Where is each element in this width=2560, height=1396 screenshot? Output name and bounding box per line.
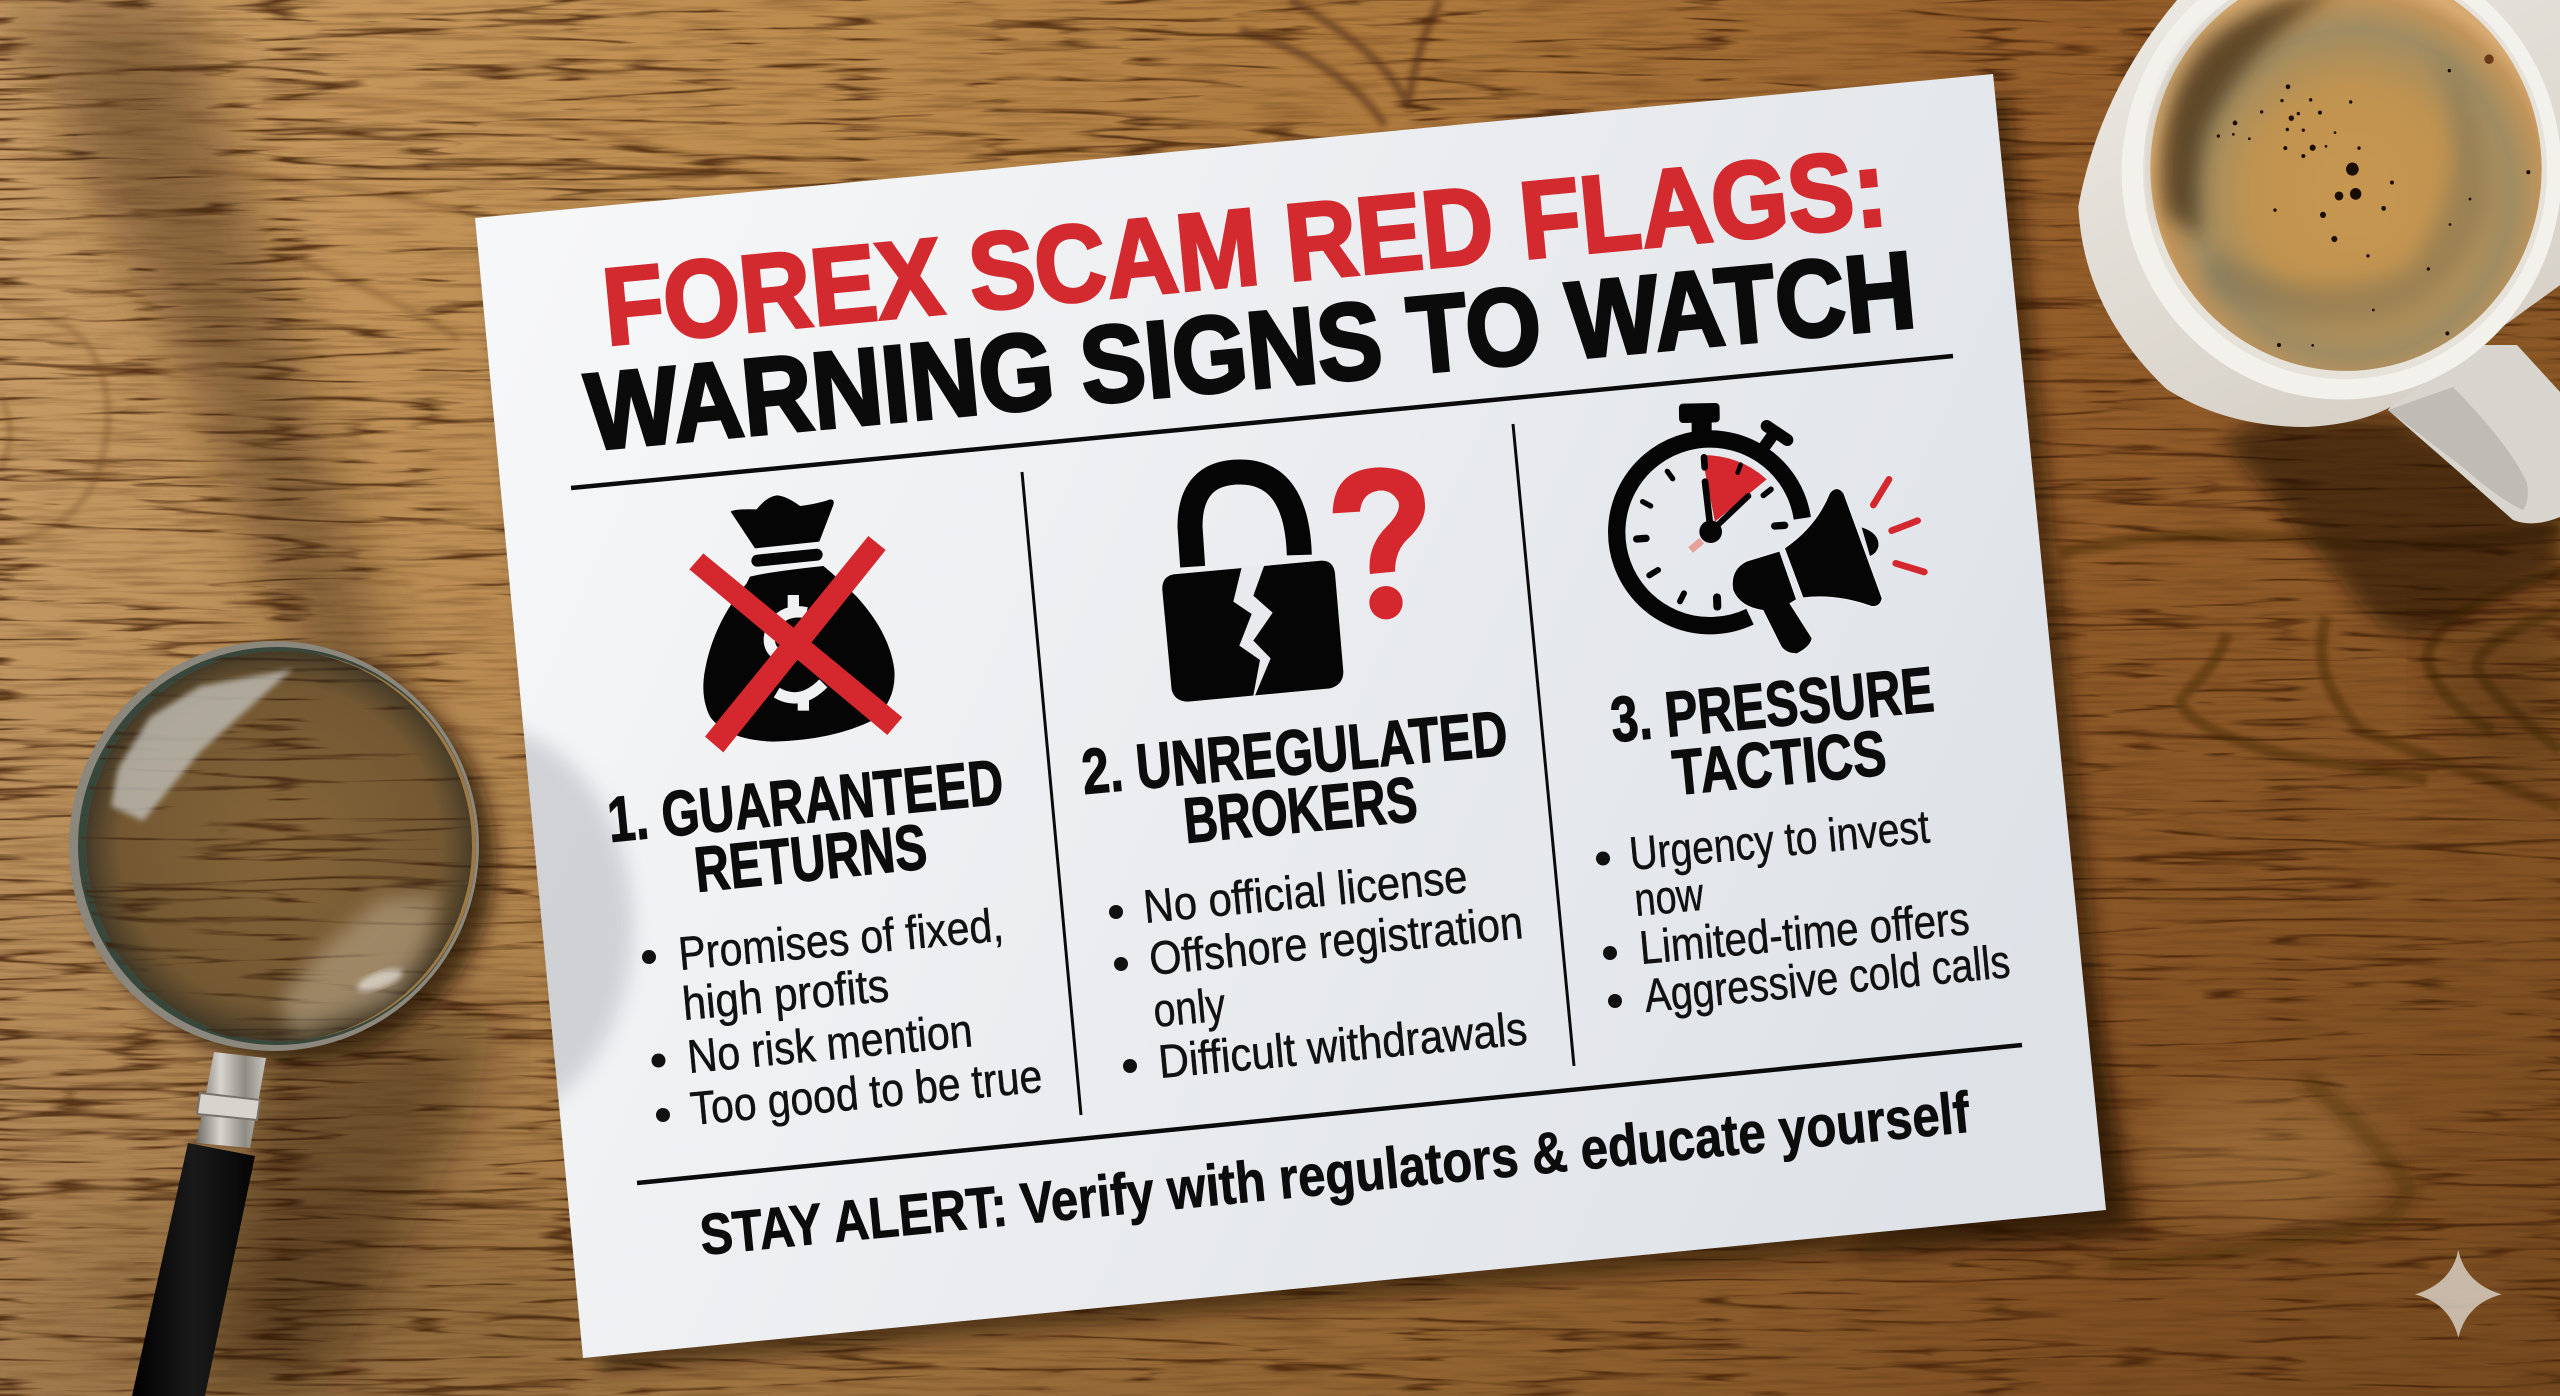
panel: pressure tactics [1596,403,2012,1022]
icon: crossed-out money bag [689,495,902,752]
coffee cup cast shadow [2220,410,2560,640]
footer callout: STAY ALERT: Verify with regulators & educate yourself [697,1080,1973,1268]
bullet list: guaranteed returns: high profits [680,958,891,1030]
bullet list: pressure tactics: Limited-time offers [1637,891,1972,974]
wood knot, lower right [2145,1085,2385,1225]
shadow of magnifier on sheet [524,726,640,1104]
heading: unregulated brokers: 2. UNREGULATED [1079,697,1510,808]
bullet list: guaranteed returns: No risk mention [685,1003,975,1083]
diagonal sun shadows [30,0,440,940]
bullet list: pressure tactics: now [1632,867,1706,926]
bullet list: guaranteed returns: Promises of fixed, [676,898,1006,980]
cup rim [2122,0,2560,400]
bullet list: unregulated brokers [1109,849,1529,1088]
bullet list: guaranteed returns: Too good to be true [688,1049,1044,1135]
icon: coffee cup [2078,0,2560,523]
icon: four-point sparkle watermark [2415,1250,2502,1338]
bullet list: unregulated brokers: Difficult withdrawals [1156,1001,1529,1088]
bullet list: pressure tactics [1596,799,2012,1022]
wood knot swirls, right side [2060,530,2560,807]
heading: guaranteed returns [604,746,1006,906]
bullet list: unregulated brokers: No official license [1141,849,1469,933]
heading: pressure tactics [1607,653,1937,809]
icon: stopwatch and megaphone [1617,403,1924,653]
panel: unregulated brokers [1079,467,1529,1088]
heading: unregulated brokers [1079,697,1510,857]
icon: magnifying glass [60,640,500,1396]
magnifier black handle [132,1143,255,1396]
panel: warning-sign sheet [323,74,2106,1358]
magnifier knurled collar [197,1093,260,1120]
bullet list: unregulated brokers: Offshore registration [1147,895,1525,985]
bullet list: pressure tactics: Aggressive cold calls [1642,934,2012,1022]
cup body [2078,0,2560,427]
heading: unregulated brokers: BROKERS [1180,763,1420,857]
bullet list: pressure tactics: Urgency to invest [1627,799,1932,880]
title: FOREX SCAM RED FLAGS: [598,127,1892,369]
title: WARNING SIGNS TO WATCH [581,229,1920,474]
bullet list: guaranteed returns [642,898,1044,1135]
magnifier metal neck [196,1052,266,1148]
bullet list: unregulated brokers: only [1151,977,1228,1037]
paper shadow [490,95,2144,1372]
heading: pressure tactics: 3. PRESSURE [1607,653,1937,756]
heading: pressure tactics: TACTICS [1669,717,1889,809]
heading: guaranteed returns: RETURNS [691,810,930,906]
coffee surface [2150,0,2542,371]
panel: guaranteed returns [604,495,1044,1135]
heading: guaranteed returns: 1. GUARANTEED [604,746,1006,856]
cup handle [2388,345,2560,523]
icon: broken padlock and question mark [1162,467,1425,702]
title [581,127,1920,474]
